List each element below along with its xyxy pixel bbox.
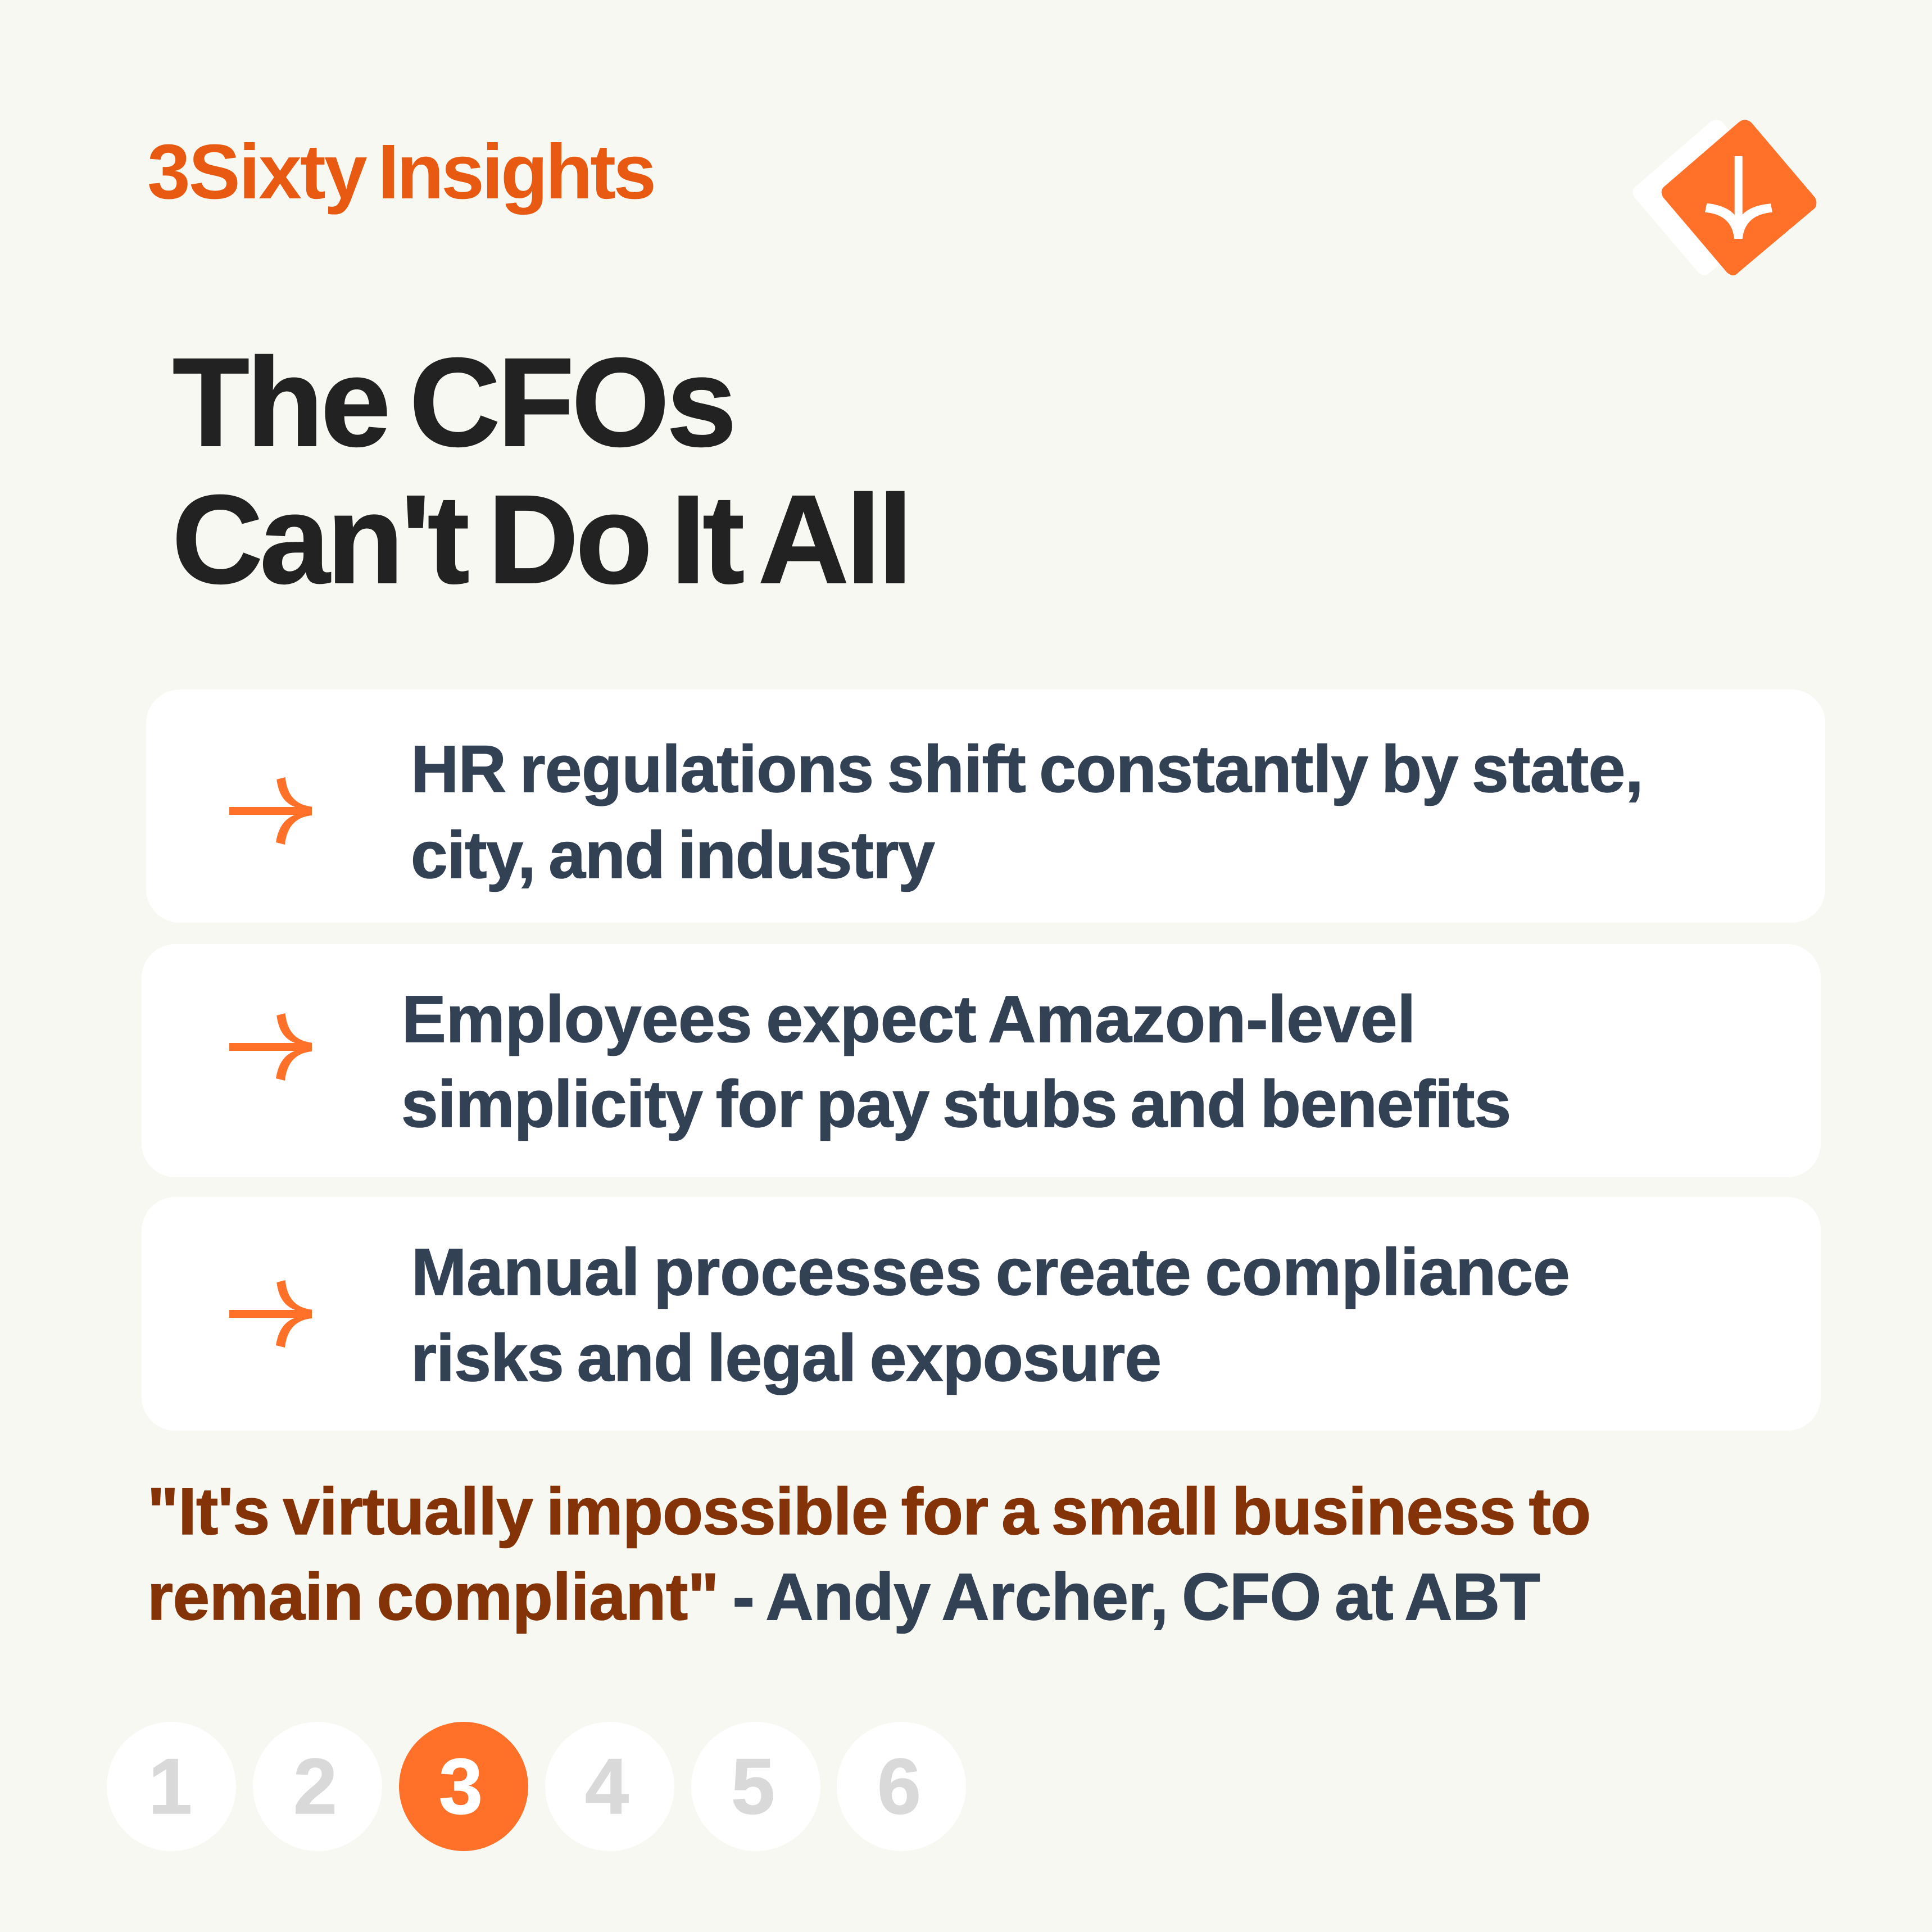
page 2: 2 — [293, 1742, 337, 1830]
page 1 — [107, 1722, 236, 1851]
icon: arrow — [229, 777, 312, 845]
title: Can't Do It All — [172, 469, 910, 610]
panel: HR regulations — [146, 690, 1825, 923]
page 2 — [253, 1722, 382, 1851]
title: The CFOs — [173, 332, 734, 473]
icon: arrow — [229, 1013, 312, 1081]
text: HR regulations: HR regulations shift constantly by state, — [411, 732, 1643, 806]
brand name: 3Sixty — [147, 129, 368, 215]
text: HR regulations: city, and industry — [411, 818, 935, 892]
page 1: 1 — [148, 1742, 192, 1830]
quote: remain compliant" - Andy Archer, CFO at ABT — [147, 1560, 1540, 1634]
page 3 current — [399, 1722, 528, 1851]
brand name: Insights — [378, 129, 654, 215]
page 6 — [837, 1722, 966, 1851]
page 6: 6 — [877, 1742, 921, 1830]
text: employee expectations: Employees expect Amazon-level — [402, 982, 1416, 1056]
text: manual processes: risks and legal exposure — [411, 1321, 1161, 1395]
text: manual processes — [411, 1235, 1570, 1395]
text: manual processes: Manual processes create compliance — [411, 1235, 1570, 1309]
quote: "It's virtually impossible for a small business to — [147, 1475, 1590, 1549]
icon: arrow — [229, 1280, 312, 1348]
panel: employee expectations — [142, 944, 1821, 1177]
text: employee expectations: simplicity for pay stubs and benefits — [401, 1067, 1511, 1141]
title — [172, 332, 910, 610]
text: HR regulations — [411, 732, 1643, 892]
text: employee expectations — [401, 982, 1511, 1141]
page 5: 5 — [731, 1742, 775, 1830]
icon: logo diamond with down arrow — [1633, 120, 1816, 275]
page 4: 4 — [585, 1742, 629, 1830]
panel: manual processes — [142, 1197, 1821, 1431]
page 5 — [691, 1722, 820, 1851]
page 4 — [545, 1722, 674, 1851]
quote — [147, 1475, 1590, 1634]
page indicator — [107, 1722, 966, 1851]
page 3 current: 3 — [439, 1742, 483, 1830]
